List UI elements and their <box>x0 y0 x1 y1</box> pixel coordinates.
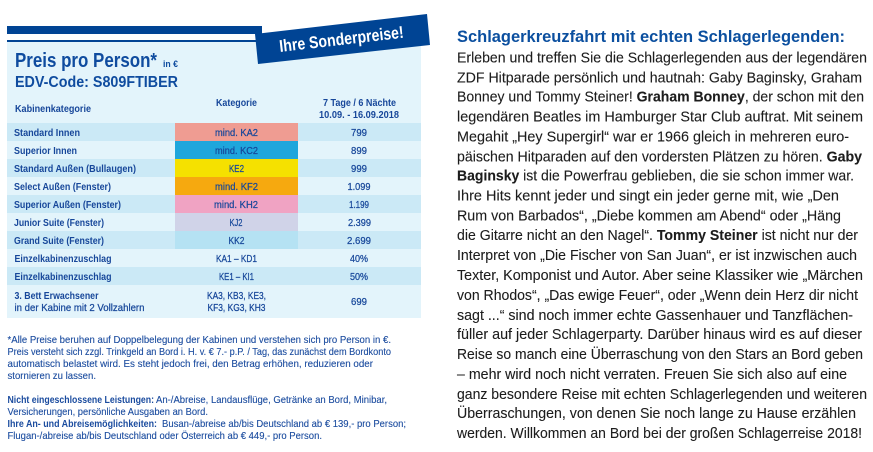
row: single cabin surcharge A-D <box>14 253 368 265</box>
text block: article body: Texter, Komponist und Autor. Aber seine Klassiker wie „Märchen <box>457 268 863 284</box>
row: Superior Innen: 899 <box>351 145 367 157</box>
table header: 7 Tage / 6 Nächte <box>323 97 396 109</box>
banner: special prices <box>255 14 430 64</box>
text block: article body: füller auf jeder Schlagerparty. Darüber hinaus wird es auf dieser <box>457 327 862 343</box>
footnote: exclusions and travel options <box>8 394 406 442</box>
row: Standard Außen <box>14 163 367 175</box>
row: Select Außen: 1.099 <box>348 181 371 193</box>
row: Grand Suite: 2.699 <box>347 235 371 247</box>
row: single cabin surcharge E-I: KE1 – KI1 <box>219 271 254 283</box>
row: Junior Suite: KJ2 <box>230 217 243 229</box>
text block: article body: Baginsky ist die Powerfrau geblieben, die sie schon immer war. <box>457 169 854 185</box>
row: Superior Außen: 1.199 <box>349 199 369 211</box>
row: Grand Suite: KK2 <box>228 235 245 247</box>
footnote: price conditions: stornieren zu lassen. <box>8 370 96 382</box>
row: Standard Außen: KE2 <box>229 163 244 175</box>
footnote: exclusions and travel options: Flugan-/abreise ab/bis Deutschland oder Österreich ab € 449,- pro Person. <box>8 430 322 442</box>
row: single cabin surcharge A-D: KA1 – KD1 <box>216 253 257 265</box>
row: Standard Innen: Standard Innen <box>14 127 80 139</box>
row: single cabin surcharge E-I <box>14 271 368 283</box>
text block: article body: die Gitarre nicht an den Nagel“. Tommy Steiner ist nicht nur der <box>457 228 858 244</box>
row: Superior Außen <box>14 199 369 211</box>
row: Standard Innen: 799 <box>351 127 367 139</box>
footnote: price conditions: Preis versteht sich zzgl. Trinkgeld an Bord i. H. v. € 7.- p.P. / Tag, das zunächst dem Bordkonto <box>8 346 391 358</box>
row: single cabin surcharge A-D: 40% <box>350 253 368 265</box>
text block: article body: von Rhodos“, „Das ewige Feuer“, oder „Wenn dein Herz dir nicht <box>457 288 858 304</box>
row: Junior Suite <box>14 217 371 229</box>
heading: price per person <box>15 50 178 91</box>
table header <box>15 97 399 121</box>
text block: article body: sagt ...“ sind noch immer echte Gassenhauer und Tanzflächen- <box>457 308 853 324</box>
row: Standard Innen: mind. KA2 <box>215 127 258 139</box>
row: Junior Suite: 2.399 <box>348 217 371 229</box>
table header: 10.09. - 16.09.2018 <box>319 109 399 121</box>
footnote: exclusions and travel options: Nicht eingeschlossene Leistungen: <box>8 395 154 406</box>
text block: article body: Interpret von „Die Fischer von San Juan“, er ist inzwischen auch <box>457 248 857 264</box>
text block: article body <box>456 51 867 442</box>
row: Standard Außen: Standard Außen (Bullaugen) <box>14 163 136 175</box>
panel: price table <box>7 14 430 318</box>
row: third bed <box>14 290 367 314</box>
banner: special prices: Ihre Sonderpreise! <box>278 23 405 56</box>
footnote: price conditions: automatisch belastet wird. Es steht jedoch frei, den Betrag erhöhen, reduzieren oder <box>8 358 373 370</box>
table header: Kabinenkategorie <box>15 103 91 115</box>
row stripes <box>7 123 421 285</box>
row: third bed: KF3, KG3, KH3 <box>208 302 266 314</box>
text block: article body: ZDF Hitparade persönlich und hautnah: Gaby Baginsky, Graham <box>457 71 862 87</box>
row: Standard Außen: 999 <box>351 163 367 175</box>
text block: article body: Rum von Barbados“, „Diebe kommen am Abend“ oder „Häng <box>457 209 841 225</box>
table header: Kategorie <box>216 97 257 109</box>
footnote: exclusions and travel options: An-/Abreise, Landausflüge, Getränke an Bord, Minibar, <box>156 394 387 406</box>
text block: article body: Bonney und Tommy Steiner! Graham Bonney, der schon mit den <box>457 90 864 106</box>
footnote: exclusions and travel options: Ihre An- und Abreisemöglichkeiten: <box>8 419 157 430</box>
row: Superior Außen: Superior Außen (Fenster) <box>14 199 121 211</box>
row: Standard Innen <box>14 127 367 139</box>
footnote: exclusions and travel options: Versicherungen, persönliche Ausgaben an Bord. <box>8 406 208 418</box>
heading: price per person: Preis pro Person* <box>15 50 157 72</box>
text block: article body: päischen Hitparaden auf den vordersten Plätzen zu hören. Gaby <box>457 150 863 166</box>
row: Grand Suite: Grand Suite (Fenster) <box>14 235 104 247</box>
text block: article body: Überraschungen, von denen Sie noch lange zu Hause erzählen <box>457 404 856 422</box>
text block: article body: – mehr wird noch nicht verraten. Freuen Sie sich also auf eine <box>457 367 847 383</box>
text block: article body: Ihre Hits kennt jeder und singt ein jeder gerne mit, wie „Den <box>457 189 839 205</box>
heading: price per person: EDV-Code: S809FTIBER <box>15 74 178 91</box>
row: Junior Suite: Junior Suite (Fenster) <box>14 217 104 229</box>
text block: article body: Megahit „Hey Supergirl“ war er 1966 gleich in mehreren euro- <box>457 130 849 146</box>
row: Select Außen: mind. KF2 <box>215 181 258 193</box>
row: third bed: 699 <box>351 296 367 308</box>
heading: price per person: in € <box>163 59 178 69</box>
footnote: price conditions: *Alle Preise beruhen auf Doppelbelegung der Kabinen und verstehen sich pro Person in €. <box>8 334 391 346</box>
row: single cabin surcharge E-I: Einzelkabinenzuschlag <box>14 271 112 283</box>
row: Superior Innen <box>14 145 367 157</box>
row: Select Außen <box>14 181 371 193</box>
footnote: price conditions <box>8 334 391 382</box>
footnote: exclusions and travel options: Busan-/abreise ab/bis Deutschland ab € 139,- pro Person; <box>162 418 406 430</box>
row: Superior Innen: Superior Innen <box>14 145 77 157</box>
row: third bed: KA3, KB3, KE3, <box>207 290 266 302</box>
heading: article title: Schlagerkreuzfahrt mit echten Schlagerlegenden: <box>457 27 845 46</box>
row: Superior Außen: mind. KH2 <box>214 199 258 211</box>
category colour swatches <box>175 123 298 249</box>
text block: article body: legendären Beatles im Hamburger Star Club auftrat. Mit seinem <box>457 110 863 126</box>
row: single cabin surcharge E-I: 50% <box>350 271 368 283</box>
row: Grand Suite <box>14 235 371 247</box>
row: Superior Innen: mind. KC2 <box>215 145 258 157</box>
header bars <box>7 26 262 42</box>
row: third bed: in der Kabine mit 2 Vollzahlern <box>14 302 145 314</box>
row: third bed: 3. Bett Erwachsener <box>14 290 98 302</box>
row: single cabin surcharge A-D: Einzelkabinenzuschlag <box>14 253 112 265</box>
row: Select Außen: Select Außen (Fenster) <box>14 181 111 193</box>
